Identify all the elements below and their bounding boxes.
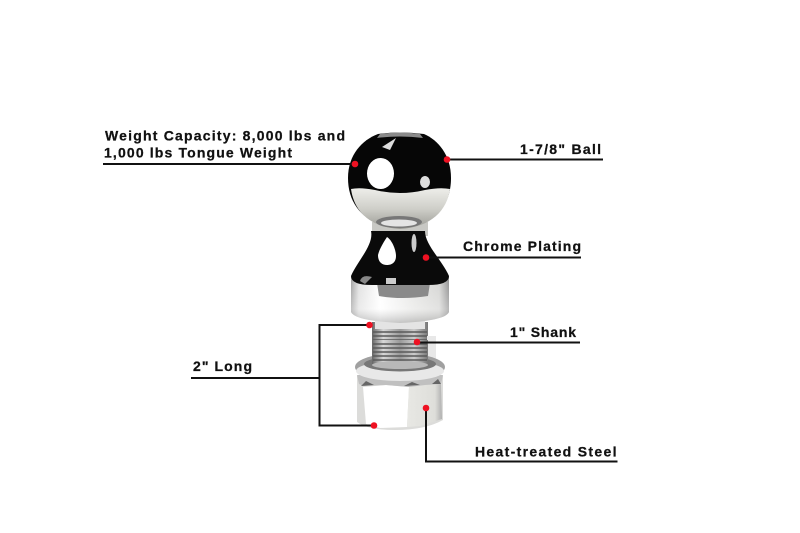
collar xyxy=(351,276,449,323)
tongue weight text: 1,000 lbs Tongue Weight xyxy=(104,144,292,160)
hitch ball product xyxy=(348,132,451,430)
label: weight capacity xyxy=(103,128,358,167)
label: ball size xyxy=(444,141,603,163)
label: heat-treated steel: Heat-treated Steel xyxy=(475,444,616,460)
nut xyxy=(357,375,443,430)
label: heat-treated steel xyxy=(423,405,618,462)
label: ball size: 1-7/8" Ball xyxy=(520,141,601,157)
washer xyxy=(355,340,445,381)
label: length bracket xyxy=(191,322,377,429)
weight capacity text: Weight Capacity: 8,000 lbs and xyxy=(105,128,345,144)
label: chrome plating: Chrome Plating xyxy=(463,238,581,254)
shank xyxy=(372,320,436,364)
label: chrome plating xyxy=(423,238,581,261)
label: shank xyxy=(414,324,580,345)
ball xyxy=(348,132,451,285)
label: shank: 1" Shank xyxy=(510,324,576,340)
label: length bracket: 2" Long xyxy=(193,358,252,374)
